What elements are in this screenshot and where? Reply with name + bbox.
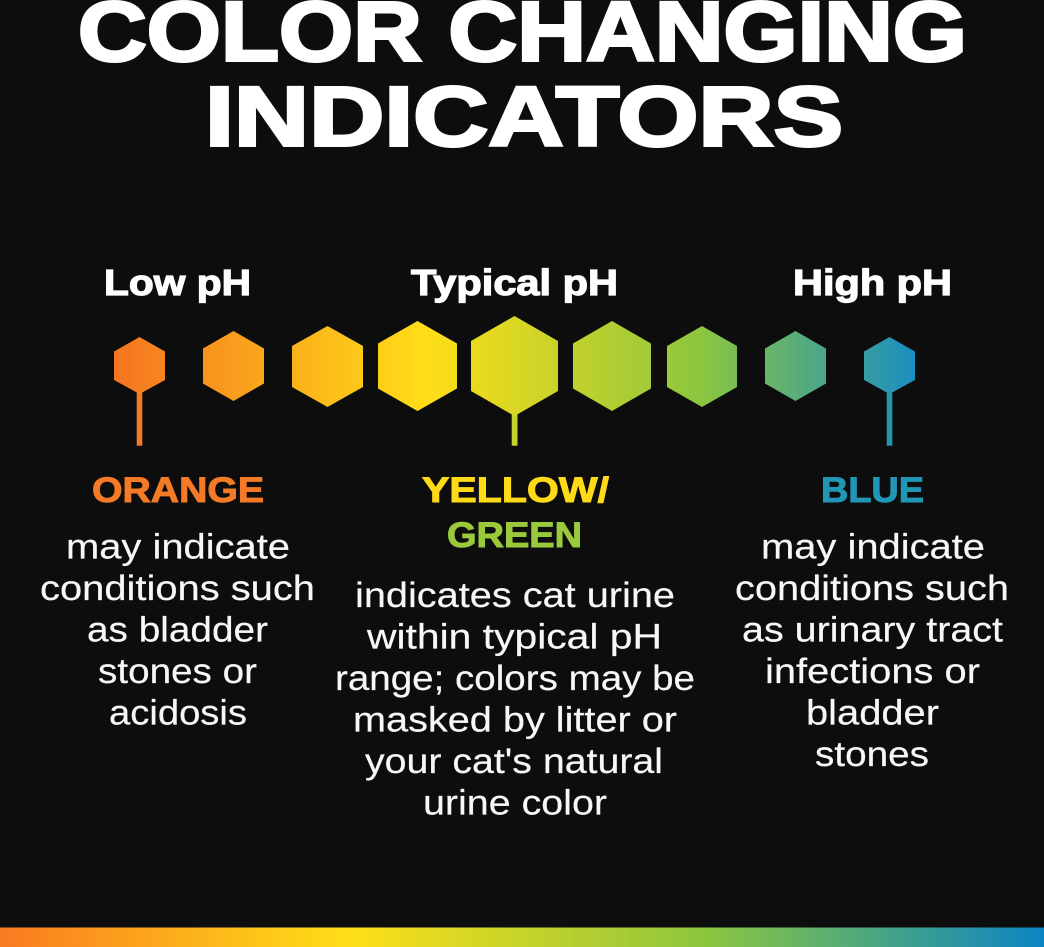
text: blue description: may indicate: [761, 528, 985, 566]
panel: yellow/green: [335, 471, 695, 822]
text: blue description: [735, 528, 1009, 774]
hexagon 9: [864, 337, 915, 394]
heading: Low pH: Low pH: [104, 262, 251, 303]
pH hexagon scale: [114, 316, 915, 446]
title: [78, 0, 967, 164]
label: YELLOW/ GREEN: GREEN: [447, 516, 582, 555]
heading: High pH: High pH: [793, 262, 952, 303]
rainbow gradient bar: [0, 928, 1044, 947]
text: orange description: acidosis: [109, 694, 247, 732]
text: yellow/green description: within typical pH: [366, 618, 662, 656]
text: blue description: as urinary tract: [742, 610, 1003, 650]
text: orange description: as bladder: [87, 610, 268, 650]
hexagon 3: [292, 326, 363, 407]
text: yellow/green description: your cat's natural: [365, 742, 663, 781]
heading: Typical pH: Typical pH: [411, 262, 618, 303]
label: YELLOW/ GREEN: YELLOW/: [422, 471, 609, 510]
text: blue description: infections or: [765, 652, 980, 691]
text: orange description: stones or: [98, 652, 257, 691]
label: ORANGE: ORANGE: [92, 471, 264, 510]
text: yellow/green description: urine color: [423, 784, 607, 822]
title: INDICATORS: [205, 70, 843, 164]
hexagon 4: [378, 321, 457, 411]
text: yellow/green description: range; colors may be: [335, 659, 695, 698]
panel: orange: [40, 471, 315, 732]
hexagon 8: [765, 331, 826, 401]
hexagon 7: [667, 326, 737, 407]
text: blue description: bladder: [806, 694, 939, 732]
text: yellow/green description: masked by litter or: [353, 700, 677, 740]
text: yellow/green description: indicates cat urine: [355, 576, 675, 615]
stem: high pH marker: [887, 385, 892, 446]
panel: blue: [735, 471, 1009, 774]
text: yellow/green description: [335, 576, 695, 822]
hexagon 6: [573, 321, 651, 411]
stem: low pH marker: [137, 385, 142, 446]
label: YELLOW/ GREEN: [422, 471, 609, 555]
text: blue description: stones: [815, 735, 929, 774]
stem: typical pH marker: [512, 408, 518, 446]
hexagon 1: [114, 337, 165, 394]
text: orange description: may indicate: [66, 528, 290, 566]
text: orange description: [40, 528, 315, 732]
hexagon 5: [471, 316, 558, 416]
text: blue description: conditions such: [735, 569, 1009, 608]
label: BLUE: BLUE: [821, 471, 924, 510]
text: orange description: conditions such: [40, 569, 315, 608]
hexagon 2: [203, 331, 264, 401]
